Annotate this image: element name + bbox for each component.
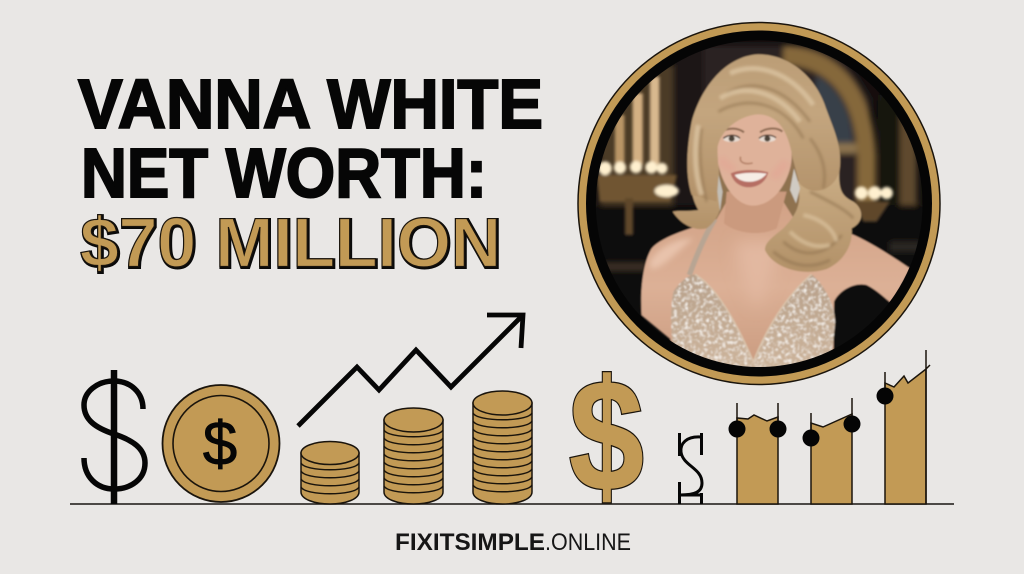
smile [731, 170, 768, 187]
icon: tall coin stack [473, 391, 532, 504]
bar 2 [802, 398, 860, 504]
dress [671, 274, 835, 372]
title line: $70 MILLION: $70 MILLION [80, 204, 501, 282]
bar 3 [876, 350, 930, 504]
earrings [717, 175, 723, 212]
title [78, 65, 543, 282]
icon: gold coin: $ [203, 410, 237, 479]
bar 1 [728, 403, 786, 504]
icon: small coin stack [301, 442, 359, 504]
hair top [687, 54, 840, 202]
icon: thin black dollar [84, 370, 145, 504]
title line: VANNA WHITE: VANNA WHITE [78, 65, 543, 143]
baseline [70, 503, 954, 505]
neck [724, 192, 787, 233]
face [717, 113, 792, 206]
icon: gold coin [162, 385, 280, 502]
arrow: rising trend [298, 315, 523, 426]
hair lower right [765, 172, 861, 272]
title line: NET WORTH: NET WORTH: [81, 134, 487, 212]
gold ring [578, 22, 940, 384]
icon: small outlined dollar [680, 433, 702, 504]
footer site name: .ONLINE [545, 529, 631, 556]
chandeliers [597, 77, 893, 235]
icon: medium coin stack [384, 408, 443, 504]
footer site name: FIXITSIMPLE [395, 529, 545, 556]
nose [740, 157, 753, 164]
footer site name [395, 529, 631, 556]
backdrop [593, 45, 927, 372]
bar chart [728, 350, 930, 504]
title line: $70 MILLION: $70 MILLION [81, 204, 502, 282]
dress straps [689, 219, 715, 275]
skin body [641, 202, 910, 372]
eyes and brows [721, 128, 782, 142]
hair back [715, 154, 800, 220]
portrait photo [593, 38, 927, 372]
icon: large gold dollar: $ [569, 348, 644, 524]
portrait medallion [578, 22, 940, 384]
hair lower left [672, 168, 720, 230]
icon: large gold dollar: $ [569, 348, 644, 524]
